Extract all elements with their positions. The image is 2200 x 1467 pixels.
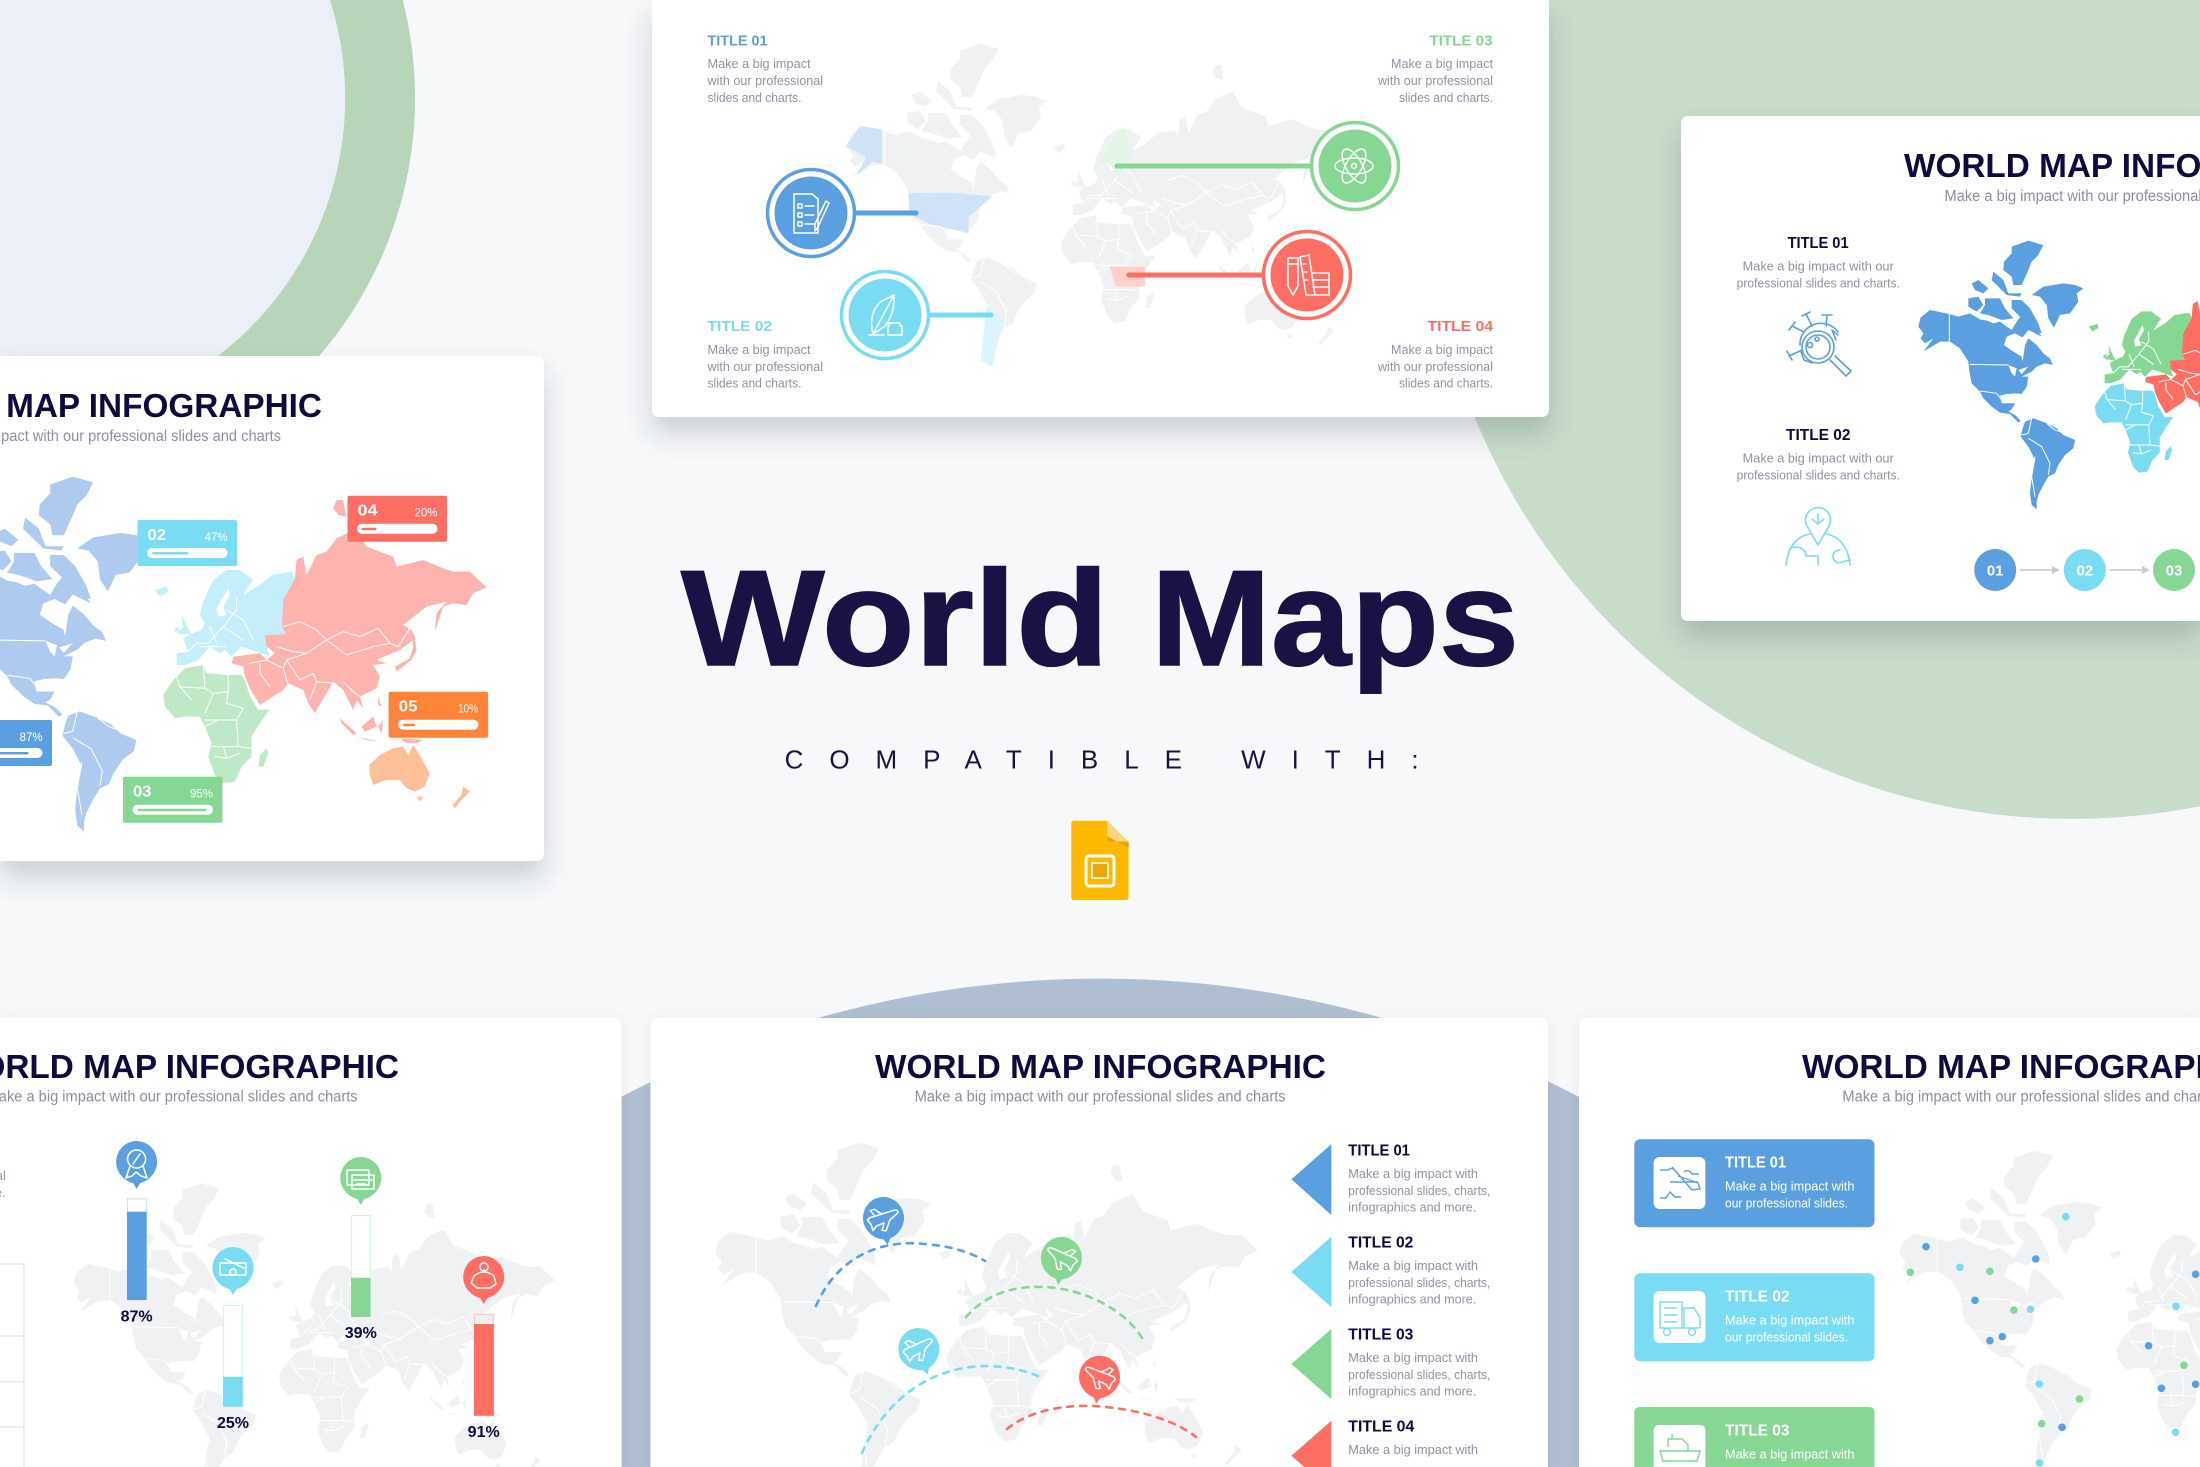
text block: title 01: slides and charts. (708, 91, 802, 105)
icon: google slides (1071, 821, 1129, 900)
bar 39%: 39% (345, 1325, 377, 1342)
highlighted countries (845, 126, 1145, 367)
list item: title 03: TITLE 03 (1348, 1326, 1414, 1343)
pin: green plane (1038, 1235, 1084, 1287)
bar 25%: 25% (217, 1415, 249, 1432)
text block: title 03: with our professional (1377, 74, 1493, 88)
data box 01: 87% (20, 730, 43, 744)
icon: virus under magnifier (1787, 312, 1851, 376)
bar 91% (463, 1256, 504, 1441)
connector: cyan circle with feather icon (842, 272, 991, 358)
text block: title 04: TITLE 04 (1428, 318, 1494, 335)
panel: bottom-left slide (0, 1018, 622, 1467)
main title: Maps (1151, 542, 1519, 694)
icon: biohazard pin on globe (1786, 508, 1850, 565)
list item: title 01: TITLE 01 (1348, 1143, 1410, 1160)
data box 05: 05 (399, 699, 418, 716)
main title: World (681, 542, 1109, 694)
bar 25% (212, 1247, 254, 1432)
list item: title 02: TITLE 02 (1348, 1235, 1413, 1252)
list item: title 01: professional slides, charts, (1348, 1184, 1490, 1198)
table fragment at left edge (0, 1169, 24, 1467)
data box 05 (389, 692, 488, 738)
location dots: cyan (1956, 1213, 2180, 1467)
list item: title 03: professional slides, charts, (1348, 1368, 1490, 1382)
decorative circle: top-right green (1427, 0, 2200, 819)
info card: title 03: Make a big impact with (1725, 1447, 1854, 1461)
text block: title 01: Make a big impact with our (1743, 260, 1894, 274)
connector: red circle with books icon (1129, 232, 1350, 318)
info card: title 02: TITLE 02 (1725, 1289, 1790, 1306)
list item: title 02: infographics and more. (1348, 1293, 1476, 1307)
text block: title 01: professional slides and charts. (1737, 277, 1900, 291)
list item: title 04: TITLE 04 (1348, 1419, 1415, 1436)
route: green (966, 1287, 1142, 1338)
data box 04: 04 (358, 503, 378, 520)
grey world map (74, 1183, 555, 1467)
route: blue (816, 1243, 985, 1306)
route: cyan (862, 1366, 1042, 1453)
decorative circle: bottom blue (225, 979, 1975, 1467)
step circle 03 (2153, 549, 2195, 591)
decorative circle: top-left pale fill (0, 0, 345, 423)
info card: title 01 (1634, 1139, 1874, 1227)
text block: title 02: slides and charts. (708, 376, 802, 390)
step circle 01: 01 (1987, 562, 2004, 580)
text block: title 02: with our professional (706, 360, 823, 374)
data box 01 (0, 720, 52, 766)
step circle 02: 02 (2076, 562, 2093, 580)
grey world map (847, 44, 1349, 367)
data box 02 (138, 520, 237, 566)
text block: title 02: Make a big impact (708, 343, 811, 357)
list item: title 04 (1291, 1419, 1478, 1467)
list item: title 04: Make a big impact with (1348, 1443, 1478, 1457)
text block: title 02 (706, 318, 823, 390)
colored world map (0, 477, 486, 832)
list item: title 01: Make a big impact with (1348, 1167, 1478, 1181)
text block: title 01: Make a big impact (708, 57, 811, 71)
subtitle: Make a big impact with our professional slides and charts (915, 1089, 1286, 1106)
text block: title 01 (1737, 235, 1900, 291)
info card: title 03 (1634, 1407, 1874, 1467)
text block: title 03: slides and charts. (1399, 91, 1493, 105)
info card: title 01: our professional slides. (1725, 1196, 1848, 1210)
info card: title 03: TITLE 03 (1725, 1422, 1790, 1439)
text block: title 04: with our professional (1377, 360, 1493, 374)
list item: title 02: Make a big impact with (1348, 1259, 1478, 1273)
text block: title 04: slides and charts. (1399, 376, 1493, 390)
data box 04: 20% (414, 506, 438, 520)
pin: red plane (1076, 1353, 1122, 1406)
text block: title 02: Make a big impact with our (1743, 451, 1894, 465)
connector: blue circle with checklist icon (768, 170, 916, 256)
heading: WORLD MAP INFOGRAPHIC (875, 1049, 1326, 1086)
text block: title 03: TITLE 03 (1430, 33, 1492, 50)
list item: title 02: professional slides, charts, (1348, 1276, 1490, 1290)
subheading: compatible with: COMPATIBLE WITH: (785, 745, 1419, 775)
bar 91%: 91% (468, 1424, 500, 1441)
text block: title 01: with our professional (706, 74, 823, 88)
list item: title 01 (1291, 1143, 1490, 1215)
bar 87% (116, 1141, 157, 1326)
panel: bottom-center slide (650, 1018, 1548, 1467)
text block: title 01: TITLE 01 (708, 33, 768, 50)
step circle 03: 03 (2166, 562, 2182, 580)
grey world map (1899, 1151, 2200, 1467)
decorative circle: top-left green ring (0, 0, 415, 493)
text block: title 02: TITLE 02 (1786, 427, 1850, 444)
panel: top center slide (652, 0, 1549, 417)
info card: title 01: TITLE 01 (1725, 1155, 1786, 1172)
info card: title 01: Make a big impact with (1725, 1180, 1854, 1194)
text block: title 01: TITLE 01 (1788, 235, 1849, 252)
text block: title 01 (706, 33, 823, 105)
data box 03 (123, 777, 222, 823)
main title (681, 542, 1519, 694)
step circle 02 (2064, 549, 2106, 591)
panel: left colored map slide (0, 356, 544, 861)
panel: right slide (1681, 116, 2200, 621)
text block: title 02 (1737, 427, 1900, 482)
location dots: green (1906, 1268, 2188, 1427)
text block: title 04 (1377, 318, 1494, 390)
info card: title 02: Make a big impact with (1725, 1314, 1854, 1328)
text block: title 04: Make a big impact (1391, 343, 1494, 357)
pin: cyan plane (893, 1322, 947, 1381)
connector: green circle with atom icon (1117, 122, 1398, 210)
data box 03: 03 (133, 784, 152, 801)
info card: title 02: our professional slides. (1725, 1330, 1848, 1344)
list item: title 01: infographics and more. (1348, 1201, 1476, 1215)
panel: bottom-right slide (1579, 1018, 2200, 1467)
pin: blue plane (860, 1194, 908, 1248)
bar 39% (340, 1157, 381, 1342)
data box 02: 47% (205, 530, 228, 544)
list item: title 03: infographics and more. (1348, 1385, 1476, 1399)
data box 03: 95% (190, 787, 213, 801)
data box 04 (348, 496, 447, 542)
step circle 01 (1974, 549, 2016, 591)
list item: title 03: Make a big impact with (1348, 1351, 1478, 1365)
route: red (1007, 1406, 1196, 1437)
location dots: blue (1922, 1243, 2199, 1431)
text block: title 03: Make a big impact (1391, 57, 1494, 71)
arrow (2110, 566, 2150, 574)
grey world map (715, 1142, 1258, 1467)
text block: title 03 (1377, 33, 1494, 105)
list item: title 02 (1291, 1235, 1490, 1307)
info card: title 02 (1634, 1273, 1874, 1361)
colored world map (1918, 241, 2200, 509)
data box 02: 02 (148, 527, 166, 544)
list item: title 03 (1291, 1326, 1490, 1399)
arrow (2020, 566, 2060, 574)
bar 87%: 87% (121, 1309, 153, 1326)
text block: title 02: TITLE 02 (708, 318, 772, 335)
text block: title 02: professional slides and charts. (1737, 468, 1900, 482)
data box 05: 10% (458, 702, 478, 716)
